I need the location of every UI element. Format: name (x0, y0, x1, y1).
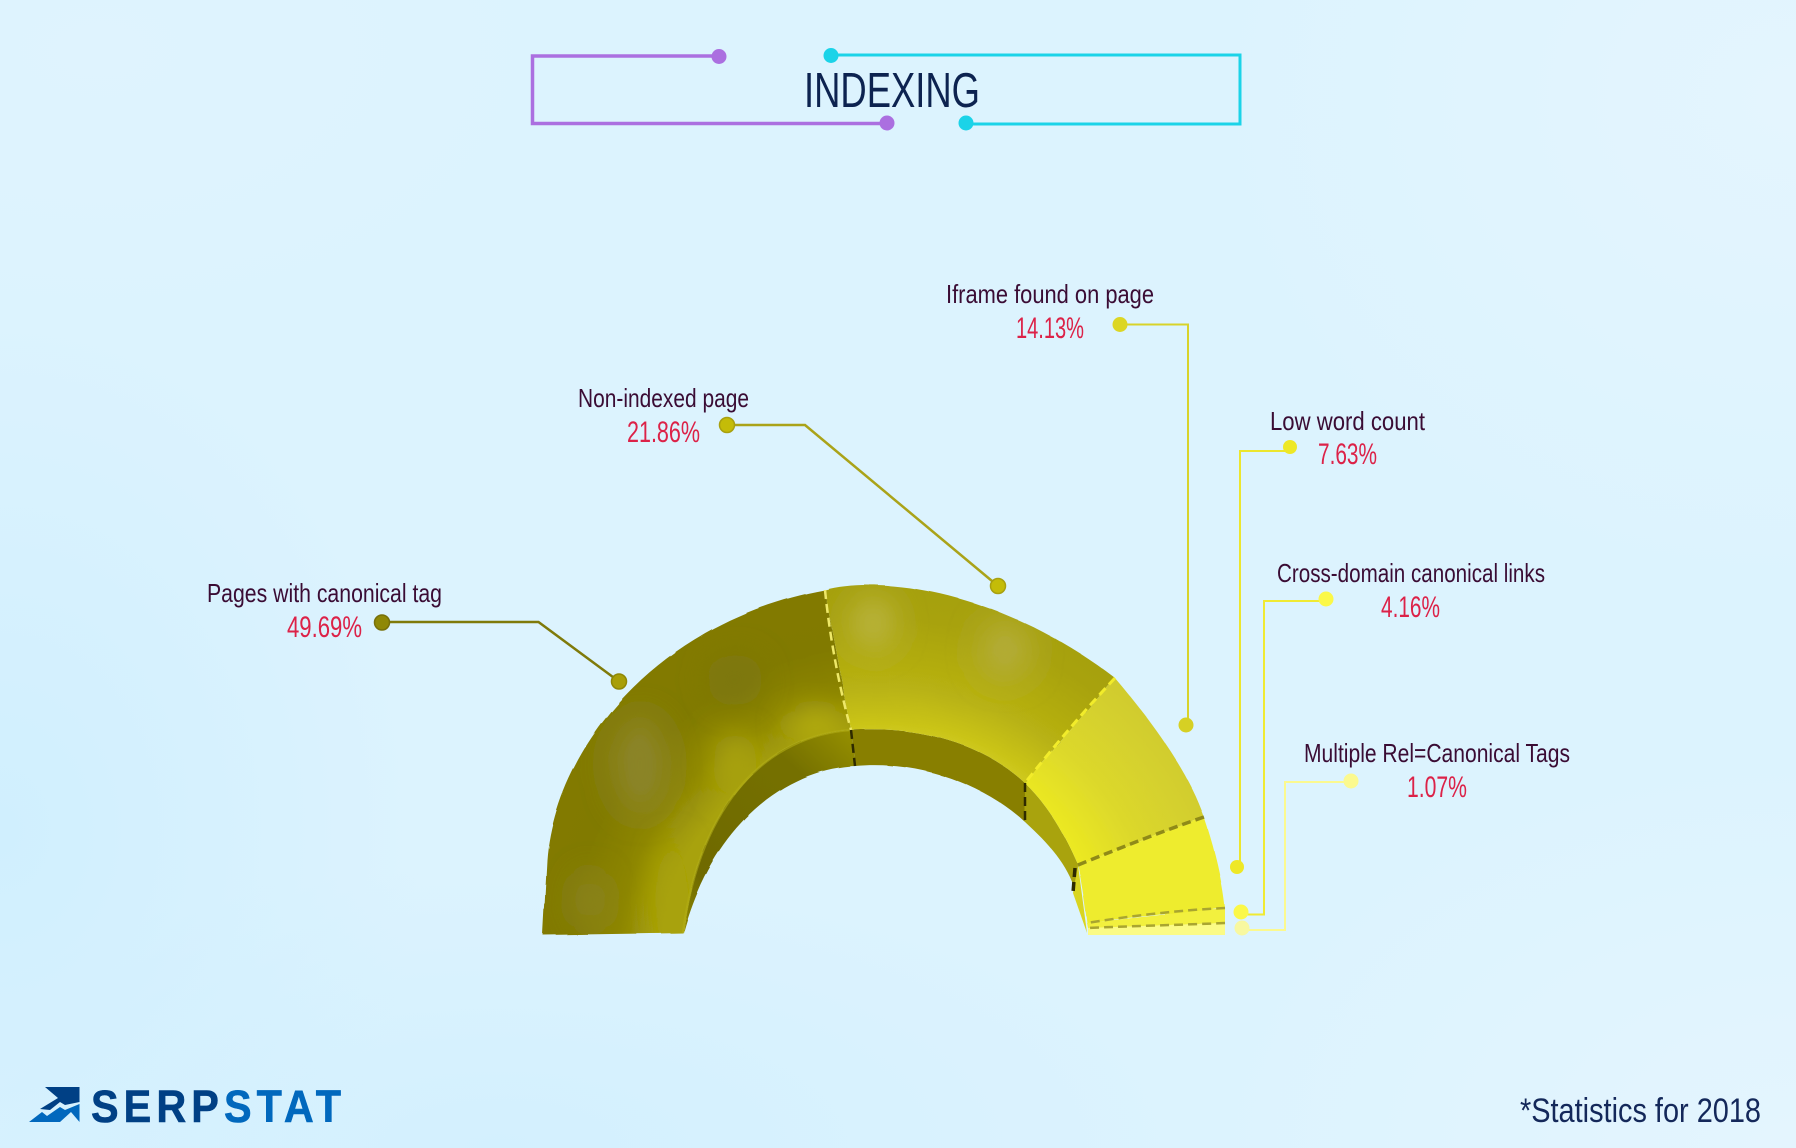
segment: low word count (1078, 817, 1225, 923)
callout: multiple rel=canonical tags: 1.07% (1407, 771, 1467, 804)
callout: low word count (1230, 406, 1426, 874)
segment: iframe found on page (1025, 678, 1204, 865)
segment seams (825, 590, 1225, 928)
inner lip highlight (683, 730, 851, 933)
callout: cross-domain canonical links: 4.16% (1381, 591, 1440, 624)
title frame (532, 48, 1240, 130)
callout: non-indexed page: 21.86% (627, 416, 700, 449)
callout: iframe found on page: Iframe found on page (946, 279, 1154, 309)
footnote: *Statistics for 2018 (1520, 1092, 1761, 1130)
semi-donut chart (543, 585, 1225, 960)
segment: cross-domain canonical links (1087, 908, 1225, 928)
callout: multiple rel=canonical tags (1234, 738, 1570, 936)
logo wordmark: SERPSTAT (91, 1082, 346, 1132)
inner sliver (1073, 865, 1087, 933)
logo icon (29, 1087, 80, 1122)
callout: iframe found on page: 14.13% (1016, 312, 1084, 345)
inner wall shading (683, 729, 1078, 933)
callout: pages with canonical tag (207, 578, 626, 689)
callout: iframe found on page (946, 279, 1194, 732)
segment: non-indexed page (825, 585, 1115, 783)
purple bracket (532, 49, 894, 130)
callout: pages with canonical tag: 49.69% (287, 611, 362, 644)
callout: multiple rel=canonical tags: Multiple Rel=Canonical Tags (1304, 738, 1570, 768)
callout: low word count: 7.63% (1318, 438, 1377, 471)
callout: cross-domain canonical links (1234, 558, 1545, 920)
segment: multiple rel=canonical tags (1088, 923, 1225, 935)
callout: low word count: Low word count (1270, 406, 1426, 436)
callout: non-indexed page (578, 383, 1006, 594)
cyan bracket (824, 48, 1240, 130)
callout: cross-domain canonical links: Cross-domain canonical links (1277, 558, 1545, 588)
segment: pages with canonical tag (543, 590, 851, 960)
title: INDEXING (804, 64, 980, 118)
callout: pages with canonical tag: Pages with canonical tag (207, 578, 442, 608)
callout: non-indexed page: Non-indexed page (578, 383, 749, 413)
logo: serpstat (29, 1082, 346, 1132)
